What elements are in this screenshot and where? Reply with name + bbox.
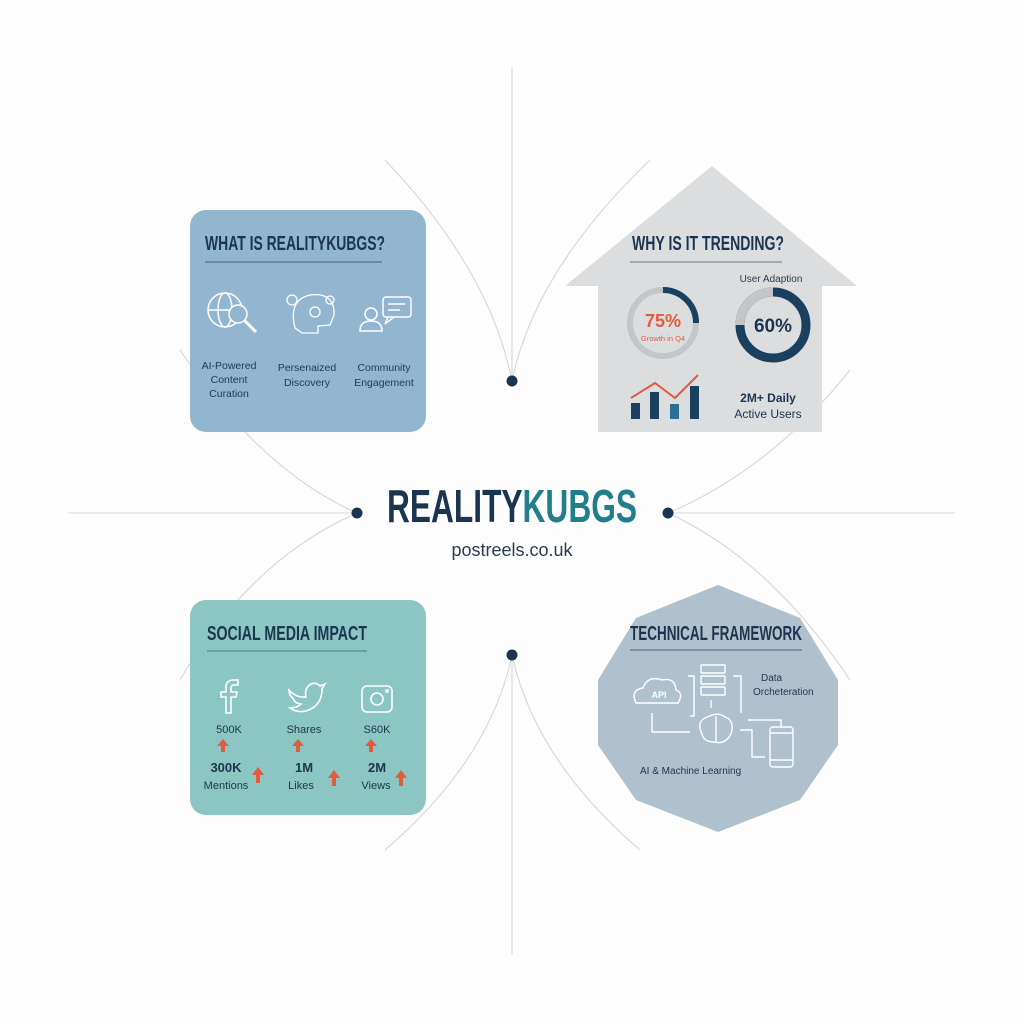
title [387, 480, 637, 560]
donut 60% [740, 274, 806, 358]
panel: what is realitykubgs [190, 210, 426, 432]
stats [204, 724, 391, 792]
labels: Content [211, 374, 247, 386]
heading: why trending: WHY IS IT TRENDING? [632, 233, 784, 255]
stat: daily users: 2M+ Daily [740, 391, 796, 405]
donut 75%: Growth in Q4 [641, 334, 685, 343]
labels: Curation [209, 388, 249, 400]
stats: Likes [288, 780, 314, 792]
panel: technical framework: API [651, 690, 667, 700]
connector dots [352, 376, 674, 660]
icon: instagram [362, 686, 392, 712]
stats: Shares [287, 724, 322, 736]
heading: what is: WHAT IS REALITYKUBGS? [205, 233, 385, 255]
diagram [634, 665, 793, 767]
labels [202, 360, 414, 400]
stat: daily users [734, 391, 802, 421]
donut 75%: 75% [645, 311, 681, 331]
labels: Engagement [354, 377, 414, 389]
stats: S60K [364, 724, 391, 736]
labels: Persenaized [278, 362, 336, 374]
stat: daily users: Active Users [734, 407, 802, 421]
icon: community [360, 297, 411, 331]
icon: twitter [289, 683, 325, 712]
panel: technical framework: Orcheteration [753, 687, 814, 698]
icon: facebook [221, 680, 238, 713]
stats: Views [361, 780, 391, 792]
donut 75% [630, 290, 696, 356]
panel: social media impact [190, 600, 426, 815]
labels: Discovery [284, 377, 331, 389]
panel: why is it trending [565, 166, 857, 432]
icon: head gears [287, 295, 334, 333]
subtitle: postreels.co.uk [451, 540, 574, 560]
donut 60%: User Adaption [740, 274, 802, 285]
chart: bars [631, 375, 699, 419]
panel: technical framework: AI & Machine Learning [640, 766, 741, 777]
labels: Community [357, 362, 411, 374]
icon: globe search [208, 293, 256, 332]
title: REALITYKUBGS [387, 480, 637, 532]
heading: social: SOCIAL MEDIA IMPACT [207, 623, 367, 645]
stats: 2M [368, 760, 386, 775]
panel: technical framework [598, 585, 838, 832]
stats: Mentions [204, 780, 249, 792]
stats: 300K [210, 760, 242, 775]
stats: 500K [216, 724, 243, 736]
donut 60%: 60% [754, 316, 792, 337]
labels: AI-Powered [202, 360, 257, 372]
panel: technical framework: Data [761, 673, 783, 684]
heading: technical: TECHNICAL FRAMEWORK [630, 623, 802, 645]
stats: 1M [295, 760, 313, 775]
